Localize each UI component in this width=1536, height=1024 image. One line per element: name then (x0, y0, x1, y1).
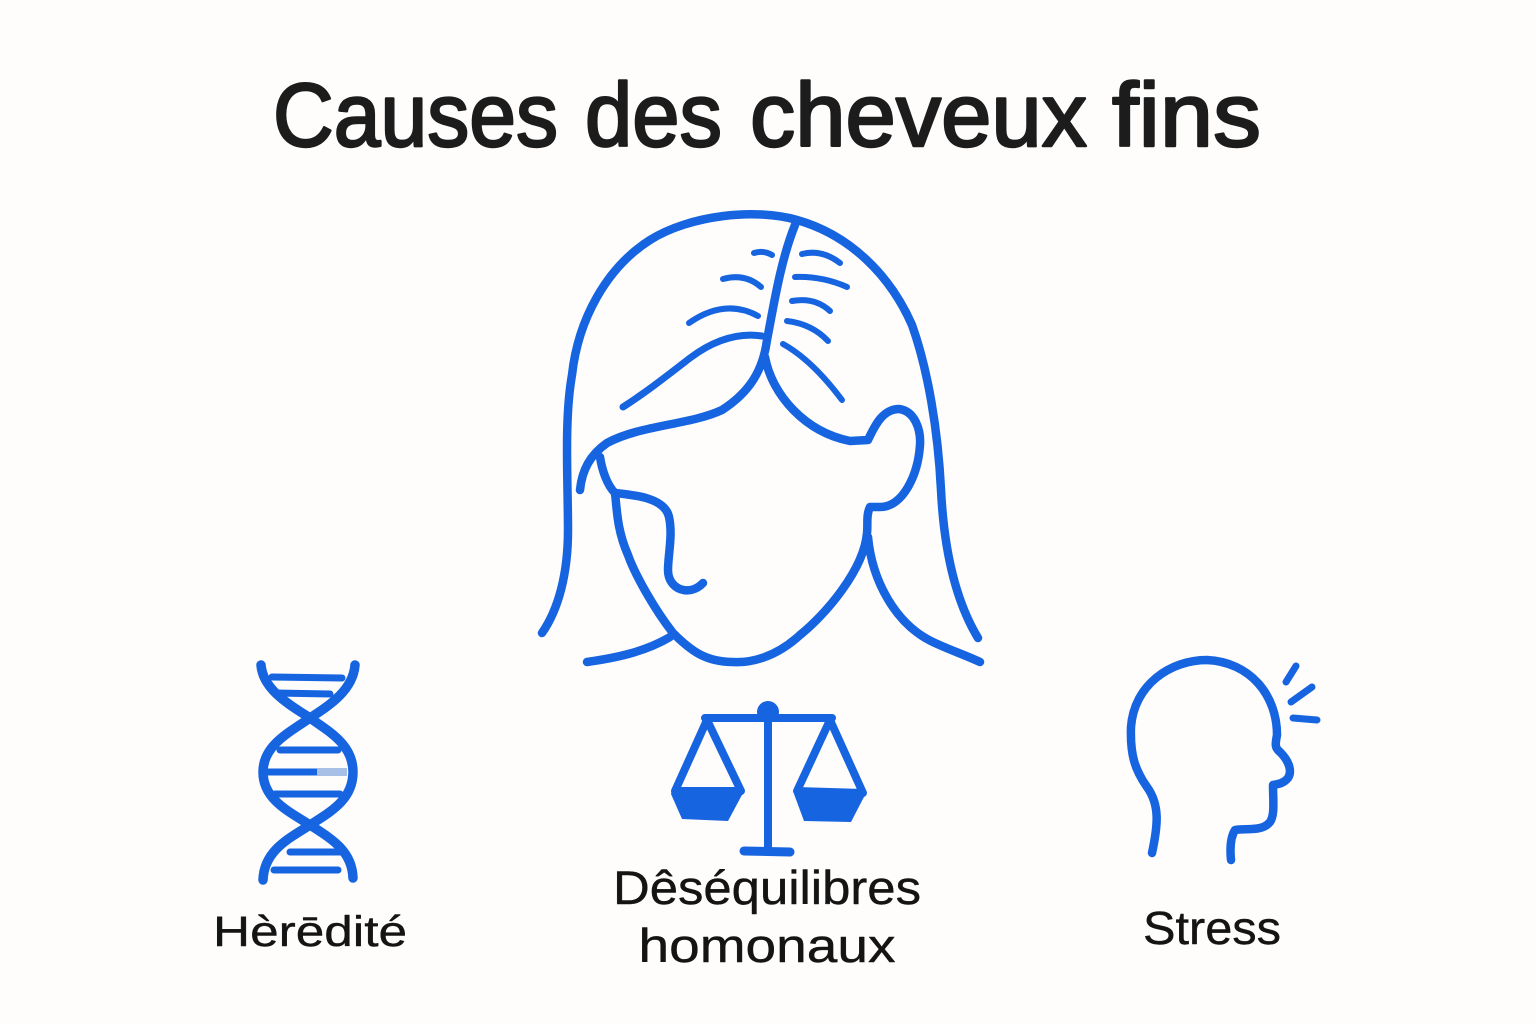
label: hormonal imbalance: homonaux (638, 919, 896, 972)
label: heredity: Hèrēdité (213, 908, 407, 956)
icon: balance scale (671, 701, 866, 852)
label: hormonal imbalance: Dêséquilibres (613, 861, 921, 914)
label: stress: Stress (1143, 902, 1281, 954)
title: des (585, 66, 722, 166)
title: Causes (273, 66, 558, 166)
title: cheveux (750, 66, 1087, 166)
icon: DNA helix (261, 665, 355, 880)
label: hormonal imbalance (613, 861, 921, 972)
illustration: woman with thinning hair (542, 214, 980, 662)
icon: stressed head profile (1131, 660, 1317, 860)
title: fins (1112, 66, 1261, 166)
